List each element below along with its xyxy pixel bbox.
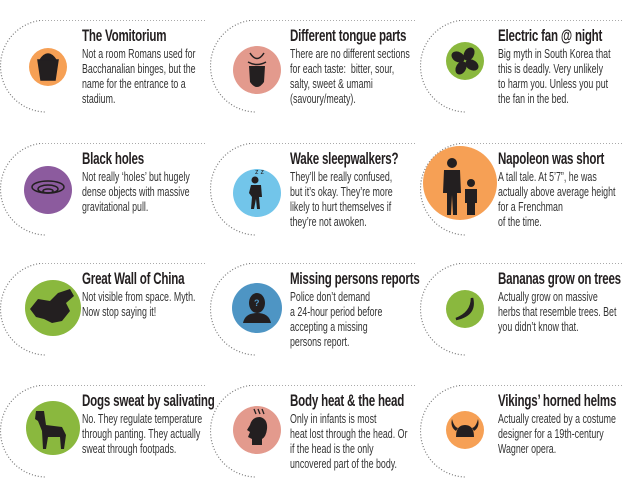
text: bananas: Actually grow on massive [498, 289, 598, 304]
text: missing persons: Police don’t demand [290, 289, 370, 304]
panel: tongue [210, 20, 415, 113]
text: dogs: through panting. They actually [82, 426, 200, 441]
text: vikings [498, 391, 616, 456]
text: missing persons: Missing persons reports [290, 269, 420, 288]
text: vomitorium: stadium. [82, 91, 115, 106]
text: sleepwalkers: likely to hurt themselves if [290, 199, 391, 214]
text: great wall: Great Wall of China [82, 269, 184, 288]
text: black holes: Black holes [82, 149, 144, 168]
text: great wall: Now stop saying it! [82, 304, 156, 319]
text: body heat: uncovered part of the body. [290, 456, 397, 471]
text: black holes: gravitational pull. [82, 199, 148, 214]
text: great wall: Not visible from space. Myth. [82, 289, 195, 304]
text: napoleon: Napoleon was short [498, 149, 604, 168]
panel: bananas [420, 263, 622, 356]
panel: napoleon [420, 143, 622, 236]
text: vikings: designer for a 19th-century [498, 426, 604, 441]
text: great wall [82, 269, 195, 319]
text: bananas: herbs that resemble trees. Bet [498, 304, 616, 319]
text: vikings: Wagner opera. [498, 441, 556, 456]
text: fan: to harm you. Unless you put [498, 76, 608, 91]
panel: missing persons [210, 263, 420, 356]
text: vomitorium: name for the entrance to a [82, 76, 186, 91]
text: vikings: Actually created by a costume [498, 411, 616, 426]
text: tongue: Different tongue parts [290, 26, 406, 45]
text: body heat: Body heat & the head [290, 391, 404, 410]
text: bananas: Bananas grow on trees [498, 269, 621, 288]
text: vomitorium: Not a room Romans used for [82, 46, 195, 61]
text: missing persons: a 24-hour period before [290, 304, 382, 319]
text: bananas [498, 269, 621, 334]
panel: great wall [0, 263, 205, 356]
panel: missing persons: ? [254, 298, 260, 308]
text: tongue: for each taste: bitter, sour, [290, 61, 394, 76]
text: tongue: There are no different sections [290, 46, 410, 61]
text: tongue: (savoury/meaty). [290, 91, 356, 106]
text: body heat [290, 391, 408, 471]
text: sleepwalkers: Wake sleepwalkers? [290, 149, 398, 168]
text: body heat: if the head is the only [290, 441, 374, 456]
text: missing persons [290, 269, 420, 349]
text: missing persons: accepting a missing [290, 319, 368, 334]
text: sleepwalkers: They’ll be really confused, [290, 169, 392, 184]
text: dogs: Dogs sweat by salivating [82, 391, 215, 410]
panel: sleepwalkers [210, 143, 415, 236]
text: napoleon: of the time. [498, 214, 542, 229]
panel: vomitorium [0, 20, 205, 113]
text: napoleon [498, 149, 616, 229]
text: body heat: Only in infants is most [290, 411, 376, 426]
text: fan: the fan in the bed. [498, 91, 569, 106]
text: napoleon: for a Frenchman [498, 199, 563, 214]
text: napoleon: actually above average height [498, 184, 615, 199]
panel: dogs [0, 385, 215, 478]
text: napoleon: A tall tale. At 5’7”, he was [498, 169, 597, 184]
text: sleepwalkers [290, 149, 398, 229]
text: vomitorium: Bacchanalian binges, but the [82, 61, 196, 76]
panel: sleepwalkers: z z [255, 169, 264, 176]
panel: vikings [420, 385, 622, 478]
text: sleepwalkers: but it’s okay. They’re more [290, 184, 393, 199]
text: fan [498, 26, 611, 106]
text: tongue [290, 26, 410, 106]
text: fan: Electric fan @ night [498, 26, 602, 45]
text: vikings: Vikings’ horned helms [498, 391, 616, 410]
text: black holes: dense objects with massive [82, 184, 190, 199]
text: vomitorium: The Vomitorium [82, 26, 166, 45]
text: black holes [82, 149, 190, 214]
text: black holes: Not really ‘holes’ but hugely [82, 169, 190, 184]
text: tongue: salty, sweet & umami [290, 76, 373, 91]
text: dogs: No. They regulate temperature [82, 411, 202, 426]
text: body heat: heat lost through the head. Or [290, 426, 407, 441]
panel: black holes [0, 143, 205, 236]
text: vomitorium [82, 26, 196, 106]
text: fan: Big myth in South Korea that [498, 46, 611, 61]
text: dogs: sweat through footpads. [82, 441, 176, 456]
text: bananas: you didn’t know that. [498, 319, 579, 334]
panel: electric fan [420, 20, 622, 113]
text: sleepwalkers: they’re not awoken. [290, 214, 367, 229]
text: dogs [82, 391, 215, 456]
panel: body heat [210, 385, 415, 478]
text: missing persons: persons report. [290, 334, 349, 349]
text: fan: this is deadly. Very unlikely [498, 61, 603, 76]
